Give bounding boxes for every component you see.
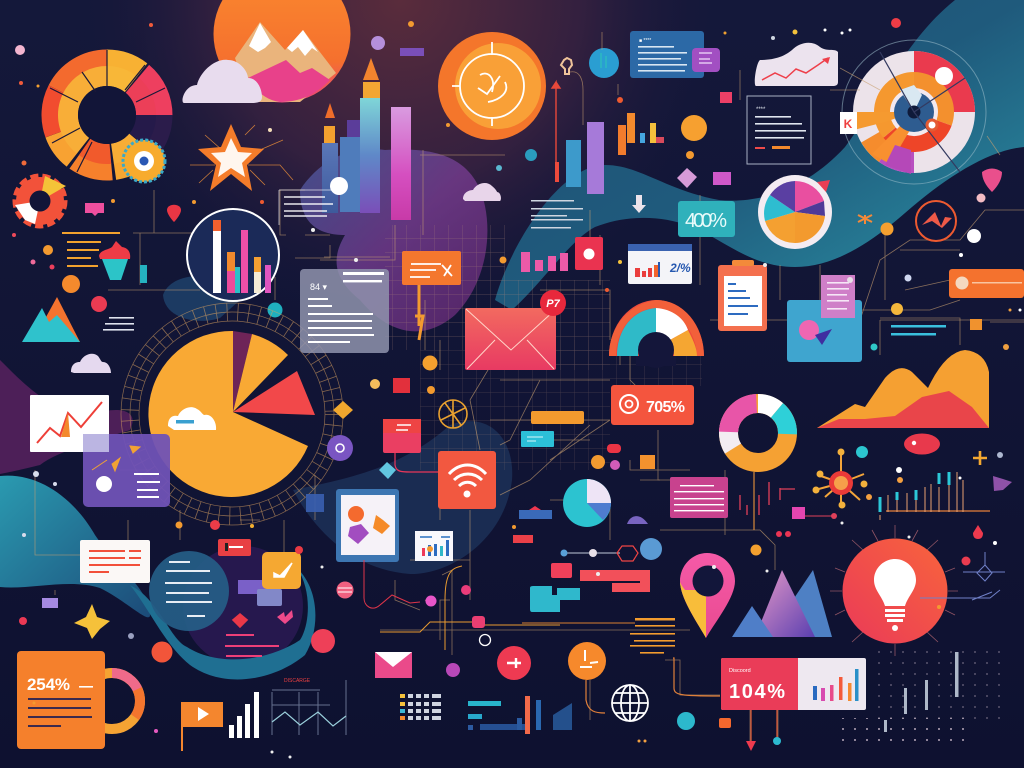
label: 705%	[611, 385, 694, 425]
icon: teal node	[773, 737, 781, 745]
icon: red dot	[295, 546, 303, 554]
icon: map pin red	[167, 205, 181, 222]
icon: ring emblem	[916, 201, 956, 241]
shapes: red and teal blocks	[530, 563, 650, 612]
icon: red badge	[91, 296, 107, 312]
blob: teal wave lower left	[0, 476, 150, 617]
stem: orange pin	[415, 285, 423, 340]
label: 400%: 400%	[685, 210, 727, 232]
icon: gold diamond	[333, 401, 353, 419]
icon: purple dot	[371, 36, 385, 50]
label: 705%: 705%	[646, 399, 685, 416]
chart: cloud trend	[755, 43, 838, 86]
panel: purple tag	[692, 48, 720, 72]
icon: pink speech tag	[85, 203, 104, 216]
icon: lilac diamond	[677, 168, 697, 188]
connector	[364, 560, 420, 608]
icon: purple rects	[238, 580, 282, 606]
icon: coral circle	[311, 629, 335, 653]
donut: segmented ring top left	[27, 35, 187, 195]
icon: red dot	[962, 556, 970, 566]
icon: red dot	[19, 617, 27, 625]
pie chart: ringed	[758, 175, 832, 249]
icon: red pin and diamond	[234, 610, 293, 626]
panel: teal card with doc	[787, 275, 862, 362]
icon: pink dot	[976, 194, 986, 202]
panel: translucent text card: 84 ▾	[310, 282, 328, 292]
text block: teal rules	[891, 325, 946, 336]
icon: node hexagon	[920, 552, 1005, 600]
chart: radial wheel	[830, 40, 1000, 184]
icon: teal dot	[856, 446, 868, 458]
text block: outlined list	[279, 190, 335, 225]
icon: gear with segments	[15, 176, 66, 226]
donut chart	[716, 391, 800, 475]
icon: cloud on pie	[168, 407, 216, 430]
panel: small bar card	[415, 531, 453, 561]
connector: orange rule	[522, 622, 635, 624]
icon: map pin	[680, 553, 735, 638]
text block: white lines	[165, 561, 212, 617]
panel: outlined text list: ****	[756, 107, 766, 113]
bar chart: mid top	[552, 82, 664, 194]
icon: teal diamond	[379, 462, 396, 479]
text block: orange rules	[630, 618, 675, 654]
panel: red tag	[218, 539, 251, 556]
table: dot grid	[400, 694, 441, 720]
icon: keyhole	[561, 58, 572, 74]
icon: orange circle	[152, 642, 172, 662]
bar chart: bottom	[480, 696, 572, 734]
bars: blue pill and caps	[513, 506, 648, 543]
panel: stat 104%: Discoord	[729, 668, 751, 674]
icon: red tile	[393, 378, 410, 393]
icon: orange node	[880, 222, 894, 236]
icon: chain nodes	[560, 538, 662, 561]
icon: gold crown	[970, 319, 982, 330]
panel: red note	[383, 419, 421, 453]
icon: small gear	[123, 140, 165, 182]
icon: red drop	[973, 525, 983, 539]
icon: pink tile	[472, 616, 485, 628]
blob: teal wave upper right	[495, 0, 1024, 310]
bar chart: city skyline	[322, 58, 411, 220]
icon: red card	[575, 237, 603, 270]
icon: small cloud left	[71, 354, 111, 373]
panel: white text note	[80, 540, 150, 583]
icon: wifi tile	[438, 451, 496, 509]
icon: envelope	[465, 308, 556, 370]
icon: magenta tile	[792, 507, 837, 519]
icon: check tile	[262, 552, 301, 589]
stem: donut to node	[753, 472, 755, 530]
pie chart: teal	[563, 479, 611, 527]
panel: document	[718, 260, 767, 331]
panel: orange note	[402, 251, 461, 285]
panel: stat 254%: 254%	[27, 675, 70, 694]
icon: teal node	[870, 344, 878, 350]
panel: translucent text card	[300, 269, 389, 353]
line bars: red	[740, 482, 795, 515]
blob: dark blue lower centre	[293, 421, 512, 574]
icon: down arrow	[632, 195, 646, 213]
text block: orange lines	[62, 232, 120, 267]
blob: plum left edge	[0, 360, 133, 474]
icon: clock badge	[438, 32, 546, 140]
blob: teal swoosh	[130, 568, 315, 679]
icon: red ellipse	[904, 434, 940, 454]
icon: orange node	[750, 544, 762, 556]
panel: blue text card: ■ ****	[639, 38, 651, 44]
icon: orange tile	[719, 718, 731, 728]
chart: line card	[30, 395, 109, 452]
icon: pink node	[426, 596, 436, 606]
text block: lines left of label	[531, 200, 583, 228]
illustration: mountain sun	[214, 0, 350, 102]
icon: mountain triangle	[22, 297, 80, 342]
icon: orange pill	[531, 411, 584, 424]
caption: red title: DISCARGE	[284, 678, 311, 684]
icon: small cloud	[463, 183, 501, 201]
connector	[556, 32, 740, 170]
icon: striped badge	[336, 582, 354, 598]
pie chart: large	[148, 331, 315, 497]
icon: teal sphere	[589, 48, 619, 78]
icon: red pin	[746, 741, 756, 751]
chart: circular bar chart	[187, 209, 279, 301]
chart: vertical ticks	[880, 472, 990, 520]
icon: pink pin	[982, 168, 1002, 192]
icon: teal badge	[268, 302, 282, 318]
icon: gold plus	[973, 451, 987, 465]
panel: orange bar card	[949, 269, 1024, 298]
icon: magenta pin	[446, 663, 460, 677]
icon: red plus circle	[497, 646, 531, 680]
chart: area	[817, 350, 989, 428]
panel: pink text card	[670, 477, 728, 518]
bars: teal rules	[468, 701, 501, 730]
panel: teal note	[521, 431, 554, 447]
icon: triangles	[732, 570, 832, 637]
icon: globe	[612, 685, 648, 721]
icon: red pill	[607, 444, 621, 453]
pie chart: radial grid	[121, 303, 343, 525]
icon: badge p7	[540, 290, 566, 316]
panel: white bar card	[628, 244, 692, 284]
connector lines network	[35, 150, 1024, 745]
icon: purple tag	[993, 476, 1012, 491]
panel: stat 104%	[721, 658, 866, 710]
icon: orange dots	[43, 245, 80, 293]
icon: teal dot	[677, 712, 695, 730]
bar chart: white	[229, 692, 259, 738]
icon: gold orbit	[439, 400, 467, 428]
connector	[880, 318, 1024, 345]
icon: blue tile	[306, 494, 324, 512]
icon: cloud top	[183, 60, 262, 103]
panel: white bar card: 2/%	[669, 261, 691, 275]
ring: arc behind stat card	[75, 664, 149, 738]
icon: pink square	[720, 92, 732, 103]
icon: gold node	[370, 379, 380, 389]
panel: outlined text list	[747, 96, 811, 164]
icon: funnel	[99, 241, 147, 283]
connector	[586, 658, 720, 713]
connector: orange	[380, 566, 560, 650]
icon: yellow star	[74, 604, 110, 639]
icon: star	[190, 124, 293, 191]
label: 400%	[678, 201, 735, 237]
bar chart: pink bars	[521, 252, 568, 272]
icon: orange cross	[858, 215, 872, 224]
text block: white lines	[103, 317, 134, 331]
blob: translucent plum	[300, 149, 487, 331]
icon: purple t-bar	[400, 48, 424, 56]
panel: tablet with shapes	[336, 489, 399, 562]
icon: lightbulb	[830, 525, 958, 656]
blob: dark blue behind chart	[163, 276, 240, 321]
blob: dark purple circle	[183, 546, 303, 666]
icon: badge p7: P7	[546, 298, 561, 310]
blob: blue circle	[149, 551, 229, 631]
icon: gold node small	[427, 386, 435, 394]
panel: grid mesh centre	[385, 225, 702, 470]
icon: orange circle	[681, 115, 707, 141]
icon: play flag	[181, 702, 223, 751]
icon: pink envelope	[375, 652, 412, 678]
panel: blue text card	[630, 31, 704, 78]
chart: radial wheel: K	[844, 117, 853, 131]
connector	[395, 453, 438, 472]
panel: purple card	[83, 434, 170, 507]
panel: stat 254%	[17, 651, 105, 749]
stems under stat	[751, 710, 777, 742]
icon: clock orange	[568, 642, 606, 680]
line chart: small	[272, 680, 346, 735]
icon: sun burst	[812, 448, 868, 508]
gauge chart	[609, 300, 704, 368]
icon: white dot	[330, 177, 348, 195]
icon: teal dot	[525, 149, 537, 161]
icon: magenta tab	[713, 172, 731, 185]
icon: purple blob	[327, 435, 353, 461]
icon: white dot	[967, 229, 981, 243]
text block: pink rules	[225, 634, 279, 657]
dot matrix	[840, 650, 1000, 750]
icon: orange and purple dots	[591, 455, 655, 470]
icon: orange node	[422, 356, 438, 370]
icon: lilac tile	[42, 598, 58, 608]
panel: stat 104%: 104%	[729, 681, 785, 703]
icon: seal	[480, 634, 490, 646]
